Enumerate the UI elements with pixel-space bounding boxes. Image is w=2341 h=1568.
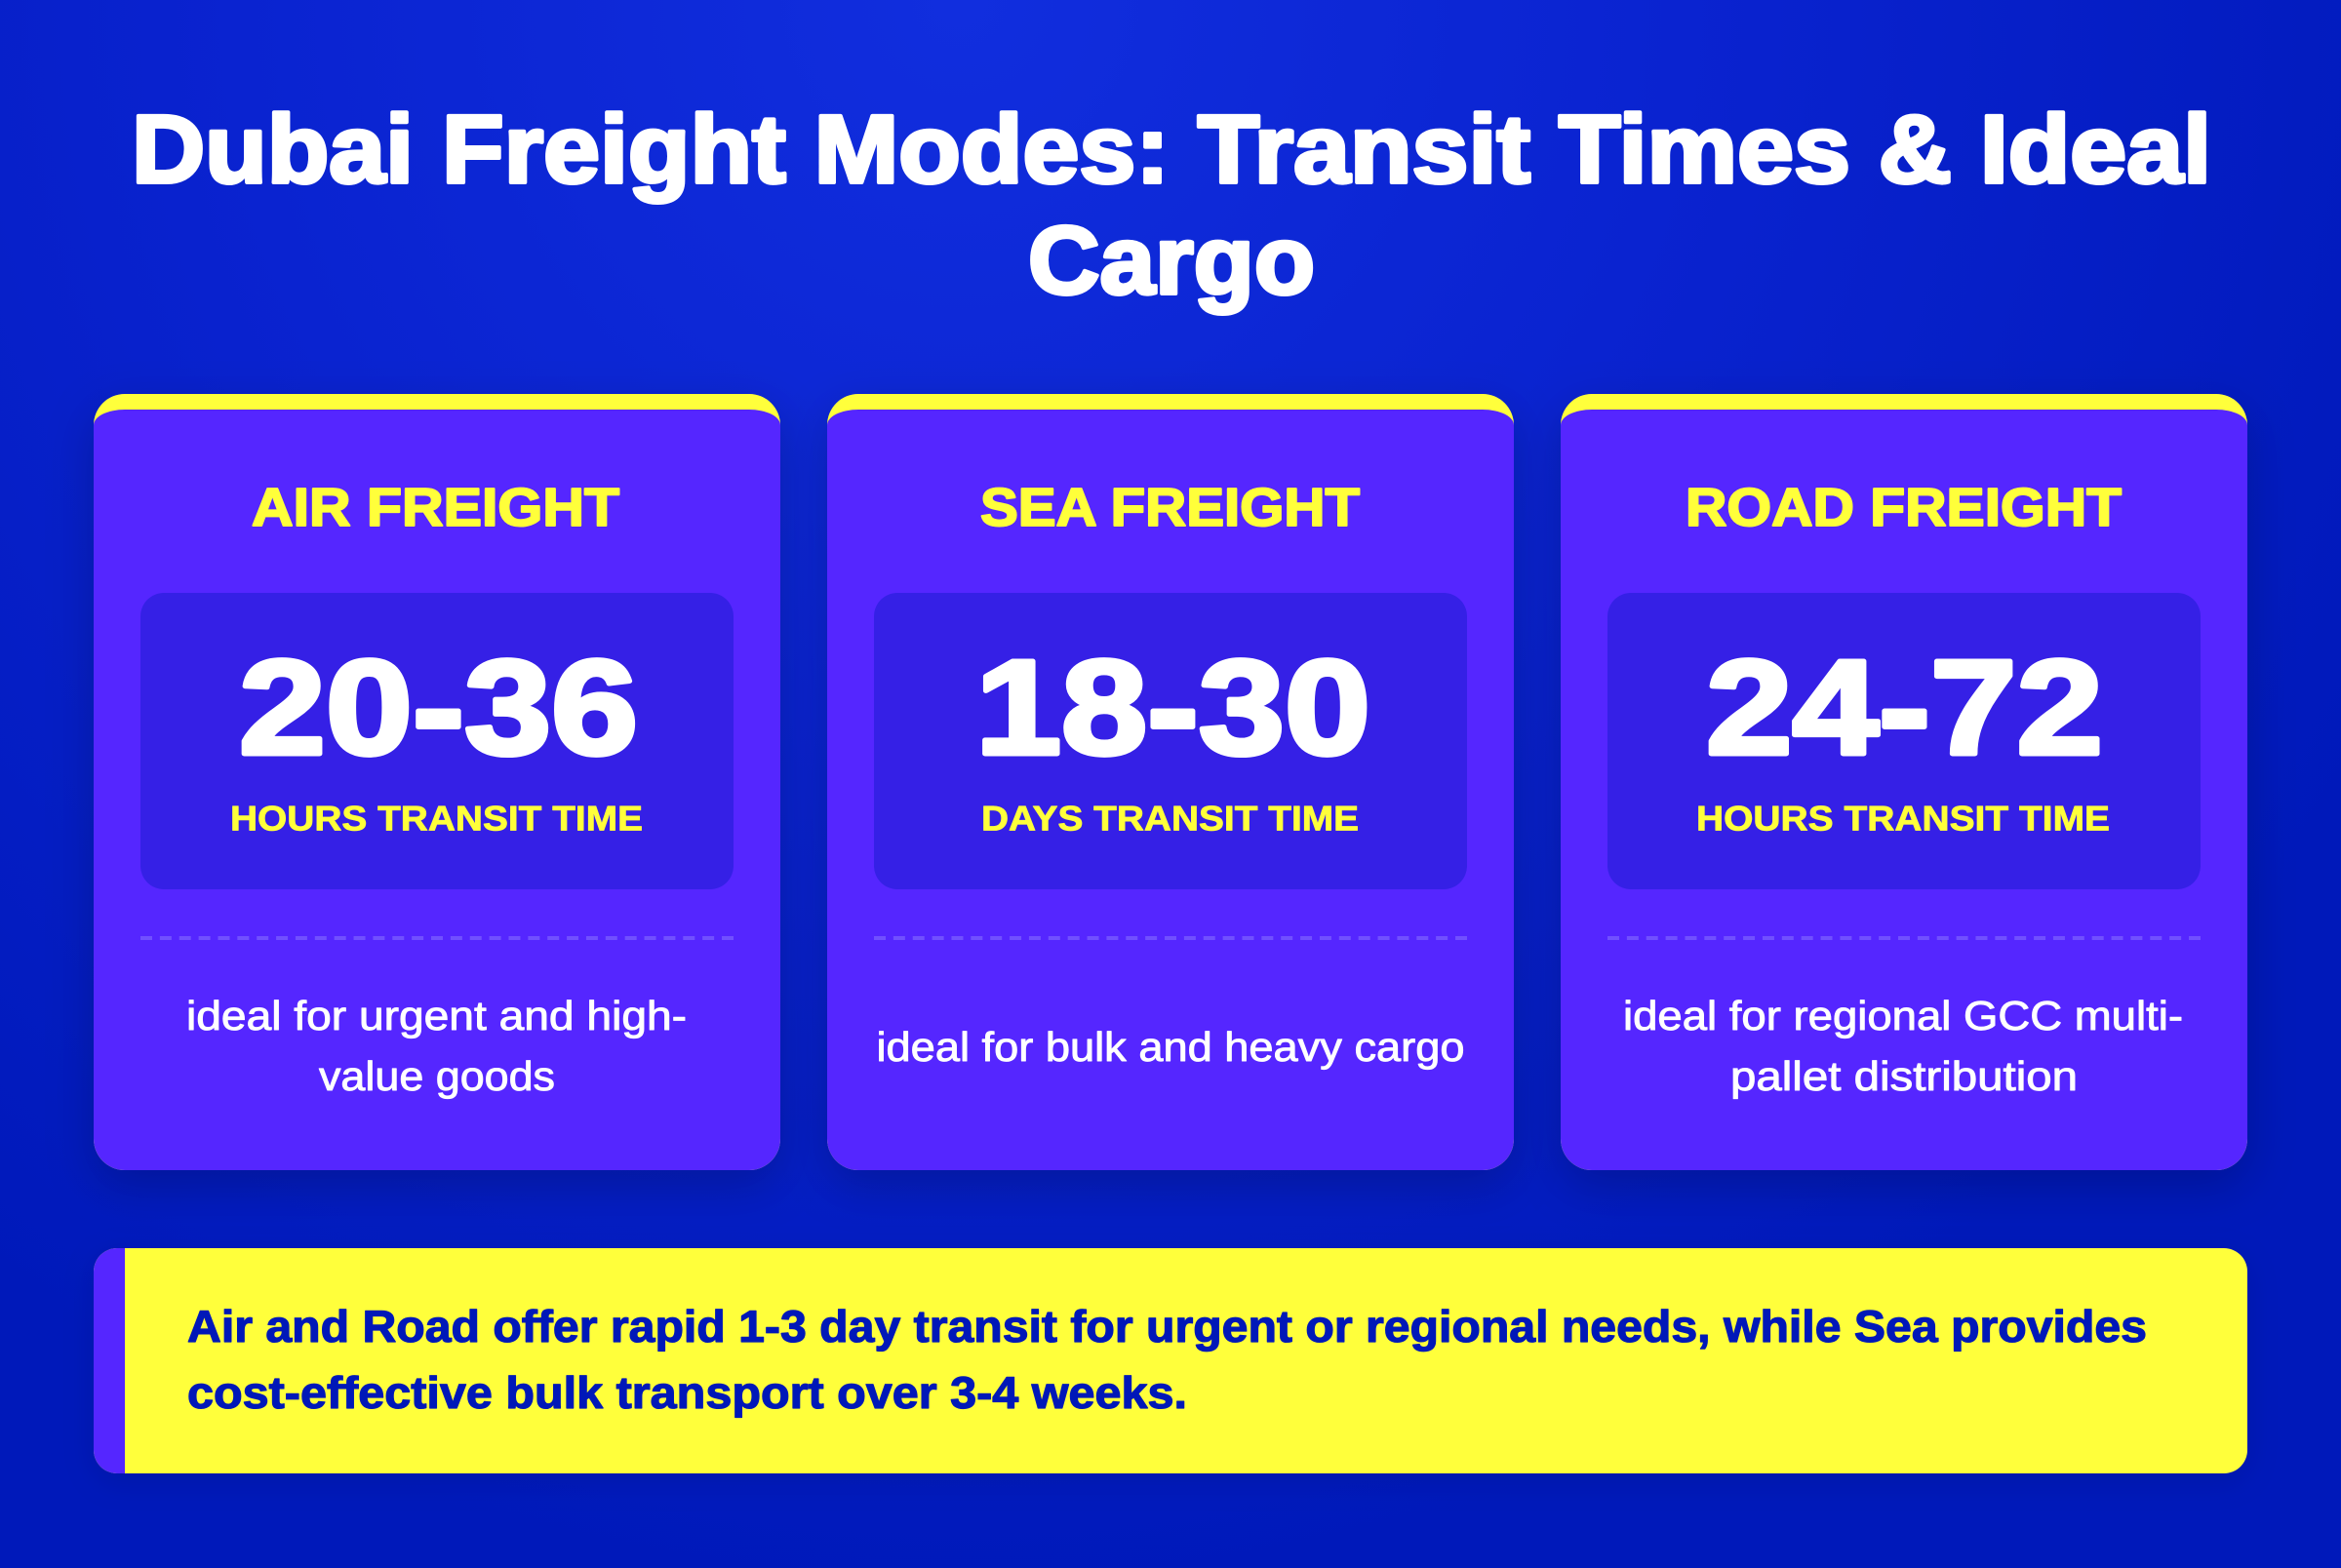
title: Cargo [1028,206,1315,314]
heading: sea freight: SEA FREIGHT [980,477,1360,537]
ideal cargo description [186,993,687,1099]
panel: air freight [94,394,780,1170]
heading: air freight: AIR FREIGHT [252,477,619,537]
callout background with purple left edge [94,1248,2247,1473]
unit label: HOURS TRANSIT TIME [230,798,643,839]
card background with yellow top edge [94,394,780,1170]
card background with yellow top edge [1561,394,2247,1170]
panel: road freight [1561,394,2247,1170]
title: Dubai Freight Modes: Transit Times & Ideal [132,95,2211,203]
ideal cargo description: value goods [319,1053,555,1099]
card background with yellow top edge [827,394,1514,1170]
transit time box [1607,593,2201,889]
panel: sea freight [827,394,1514,1170]
ideal cargo description [1623,993,2183,1099]
ideal cargo description: ideal for regional GCC multi- [1623,993,2183,1039]
number: 20-36: 20-36 [239,633,638,783]
transit time box [874,593,1467,889]
ideal cargo description: ideal for urgent and high- [186,993,687,1039]
unit label: DAYS TRANSIT TIME [981,798,1359,839]
transit time box [140,593,734,889]
unit label: HOURS TRANSIT TIME [1696,798,2110,839]
ideal cargo description: ideal for bulk and heavy cargo [876,1024,1465,1070]
ideal cargo description: pallet distribution [1730,1053,2078,1099]
callout text [187,1301,2147,1418]
number: 24-72: 24-72 [1706,633,2103,783]
number: 18-30: 18-30 [975,633,1370,783]
title [132,95,2211,314]
callout text: Air and Road offer rapid 1-3 day transit for urgent or regional needs, while Sea provides [187,1301,2147,1352]
callout text: cost-effective bulk transport over 3-4 weeks. [187,1367,1187,1418]
callout: summary [94,1248,2247,1473]
heading: road freight: ROAD FREIGHT [1686,477,2122,537]
